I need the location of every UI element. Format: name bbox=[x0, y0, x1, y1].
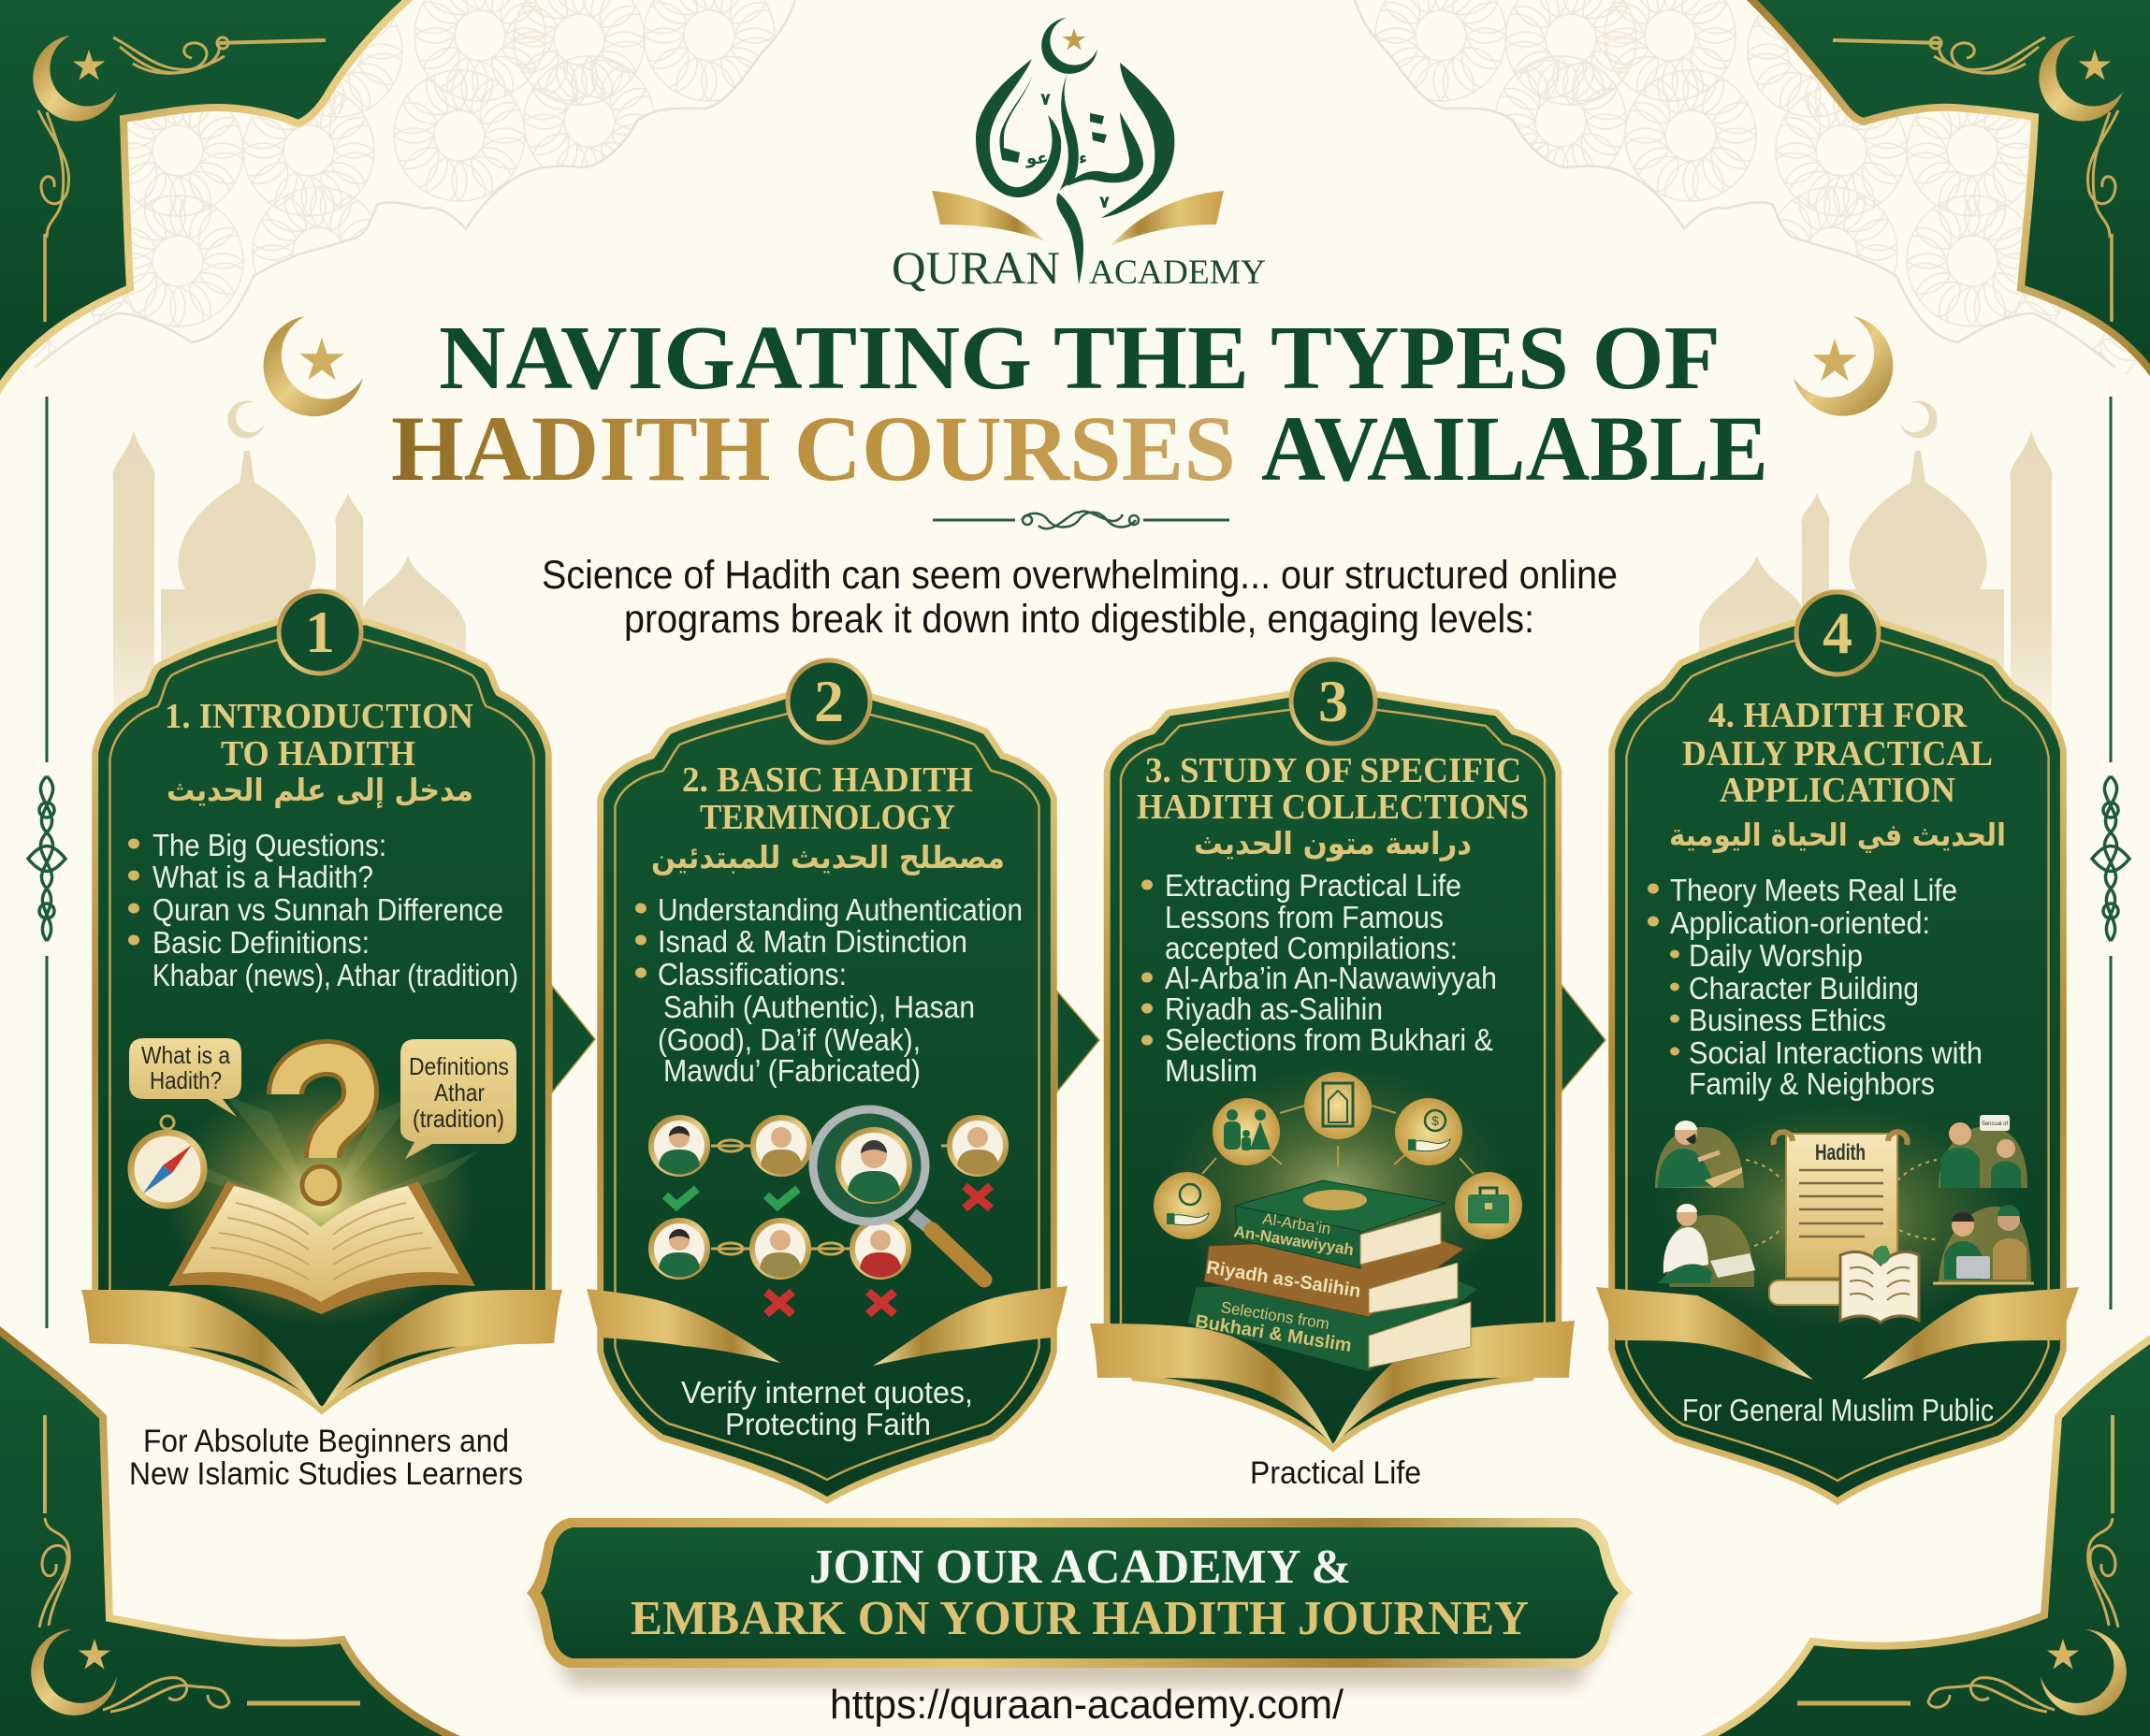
panel 2 heading: 2. BASIC HADITH bbox=[682, 760, 973, 800]
speech bubble: definitions: (tradition) bbox=[413, 1105, 504, 1133]
arrow 3 to 4 bbox=[1562, 985, 1605, 1092]
icon: hadith scroll bbox=[1769, 1132, 1907, 1305]
speech bubble: definitions: Athar bbox=[434, 1078, 485, 1107]
panel 4 heading: APPLICATION bbox=[1720, 771, 1955, 810]
ribbon left bbox=[81, 1290, 322, 1409]
speech bubble: what is a hadith: What is a bbox=[141, 1041, 230, 1069]
icon: question mark bbox=[285, 1058, 360, 1204]
panel 1 heading: مدخل إلى علم الحديث bbox=[167, 772, 473, 809]
panel 1 heading: TO HADITH bbox=[221, 734, 415, 774]
logo small Arabic marks: ء bbox=[1079, 149, 1087, 168]
panel 1 bullets bbox=[128, 828, 518, 992]
icon: open book with leaf bbox=[1840, 1246, 1919, 1323]
corner frame: top right bbox=[1742, 0, 2150, 383]
ribbon left bbox=[587, 1289, 780, 1363]
corner frame: top left bbox=[0, 0, 418, 402]
title bbox=[391, 308, 1768, 500]
speech bubble: definitions: Definitions bbox=[409, 1052, 509, 1080]
ribbon right bbox=[1333, 1321, 1575, 1445]
icon: crescent and star top right bbox=[2039, 36, 2123, 122]
panel 3 number: 3 bbox=[1318, 668, 1348, 734]
icon: open book bbox=[168, 1181, 475, 1314]
panel 1 bullets: The Big Questions: bbox=[153, 828, 386, 862]
title: HADITH COURSES bbox=[391, 397, 1236, 500]
isnad chain row 1 bbox=[651, 1118, 1006, 1175]
vignette: reciting person bbox=[1655, 1121, 1744, 1188]
flourish top left bbox=[38, 37, 326, 322]
background pattern: top right rosettes bbox=[1355, 0, 2149, 397]
panel 1 shape bbox=[95, 622, 548, 1410]
mosque silhouette left bbox=[113, 400, 466, 748]
panel 2 number: 2 bbox=[814, 668, 844, 734]
icon: stack of hadith books bbox=[1187, 1180, 1478, 1372]
icon: magnifying glass bbox=[813, 1109, 984, 1280]
panel 3 shape bbox=[1107, 694, 1559, 1448]
panel 4 bullets: Theory Meets Real Life bbox=[1670, 873, 1957, 907]
small speech note: Sensual of bbox=[1982, 1121, 2009, 1127]
panel 2 bullets: Isnad & Matn Distinction bbox=[658, 924, 967, 959]
panel 3 bullets: Muslim bbox=[1165, 1053, 1257, 1088]
panel 4 bullets: Social Interactions with bbox=[1689, 1035, 1983, 1070]
middle book: Riyadh as-Salihin bbox=[1205, 1257, 1362, 1302]
glow behind books bbox=[1165, 1066, 1511, 1309]
panel 4 heading: DAILY PRACTICAL bbox=[1682, 734, 1993, 774]
panel 2 bullets bbox=[635, 892, 1023, 1088]
speech bubble: definitions bbox=[400, 1039, 516, 1159]
top book: An-Nawawiyyah bbox=[1232, 1222, 1355, 1259]
panel 2 heading: TERMINOLOGY bbox=[700, 798, 955, 837]
panel 2 footer: Verify internet quotes, bbox=[681, 1375, 973, 1410]
panel 1 bullets: Khabar (news), Athar (tradition) bbox=[153, 958, 518, 992]
panel 4 number: 4 bbox=[1823, 600, 1852, 666]
icon: charity hand with coin bbox=[1395, 1098, 1462, 1165]
side line and ornament left bbox=[28, 397, 65, 1328]
ribbon left bbox=[1090, 1324, 1333, 1445]
bottom book: Selections from bbox=[1220, 1298, 1330, 1333]
panel 1 audience label bbox=[129, 1424, 523, 1492]
side line and ornament right bbox=[2092, 397, 2129, 1309]
ribbon right bbox=[322, 1290, 562, 1409]
logo small Arabic marks bbox=[1025, 90, 1110, 212]
panel 4 footer: For General Muslim Public bbox=[1682, 1393, 1994, 1427]
panel 3 heading: دراسة متون الحديث bbox=[1194, 825, 1472, 862]
vignette: two people talking bbox=[1939, 1115, 2027, 1188]
panel 4 shape bbox=[1612, 623, 2063, 1501]
title: AVAILABLE bbox=[1261, 397, 1768, 500]
corner frame: bottom left bbox=[0, 1324, 472, 1736]
panel 3 bullets bbox=[1141, 868, 1497, 1088]
banner green body bbox=[541, 1527, 1619, 1658]
vignette: business at laptop bbox=[1933, 1205, 2034, 1283]
panel 4 bullets: Daily Worship bbox=[1689, 938, 1863, 973]
panel 2 bullets: Mawdu’ (Fabricated) bbox=[663, 1053, 921, 1088]
bottom book bbox=[1187, 1274, 1478, 1372]
logo wordmark: QURAN bbox=[892, 241, 1060, 294]
panel 4 bullets bbox=[1648, 873, 1983, 1101]
panel 1 audience label: For Absolute Beginners and bbox=[143, 1424, 509, 1459]
panel 3 bullets: accepted Compilations: bbox=[1165, 931, 1458, 965]
arc connecting icons bbox=[1202, 1106, 1474, 1174]
panel 1 heading bbox=[165, 697, 473, 809]
logo small Arabic marks: عو bbox=[1025, 149, 1049, 168]
panel 2 number bbox=[788, 660, 870, 743]
icon: briefcase bbox=[1455, 1172, 1522, 1239]
logo emblem: calligraphic strokes bbox=[976, 59, 1174, 284]
icon: title crescent right bbox=[1794, 316, 1893, 416]
panel 1 bullets: What is a Hadith? bbox=[153, 860, 373, 894]
vignette: praying person bbox=[1658, 1204, 1755, 1287]
panel 4 number bbox=[1796, 592, 1879, 674]
panel 1 number bbox=[279, 591, 361, 673]
panel 1 audience label: New Islamic Studies Learners bbox=[129, 1456, 523, 1492]
panel 2 bullets: Classifications: bbox=[658, 957, 847, 991]
logo bbox=[892, 18, 1266, 294]
arrow 1 to 2 bbox=[552, 986, 595, 1092]
panel 2 footer bbox=[681, 1375, 973, 1441]
ribbon right bbox=[873, 1286, 1068, 1366]
panel 2 bullets: Understanding Authentication bbox=[658, 892, 1023, 927]
panel 2 heading: مصطلح الحديث للمبتدئين bbox=[651, 839, 1005, 876]
panel 3 audience label: Practical Life bbox=[1250, 1455, 1421, 1491]
panel 4 heading bbox=[1669, 696, 2006, 854]
banner text bbox=[631, 1541, 1529, 1645]
isnad chain row 2 bbox=[651, 1221, 908, 1278]
panel 4 bullets: Business Ethics bbox=[1689, 1003, 1886, 1037]
title: NAVIGATING THE TYPES OF bbox=[439, 308, 1721, 409]
connector dots bbox=[1746, 1160, 1937, 1246]
top book: Al-Arba’in bbox=[1261, 1209, 1332, 1238]
panel 3 heading: 3. STUDY OF SPECIFIC bbox=[1145, 751, 1521, 790]
arrow 2 to 3 bbox=[1057, 991, 1099, 1092]
panel 1 heading: 1. INTRODUCTION bbox=[165, 697, 473, 736]
panel 4 bullets: Family & Neighbors bbox=[1689, 1066, 1935, 1101]
icon: hand with emblem bbox=[1154, 1172, 1221, 1239]
panel 1 bullets: Quran vs Sunnah Difference bbox=[153, 892, 503, 927]
panel 2: basic hadith terminology bbox=[587, 660, 1099, 1500]
top book bbox=[1232, 1180, 1445, 1268]
panel 2 shape bbox=[601, 696, 1053, 1500]
speech bubble: what is a hadith bbox=[129, 1038, 241, 1117]
logo emblem: crescent and star bbox=[1041, 18, 1097, 74]
panel 3 bullets: Lessons from Famous bbox=[1165, 900, 1444, 934]
icon: crescent and star top left bbox=[33, 36, 117, 122]
ribbon left bbox=[1596, 1287, 1813, 1380]
panel 3 bullets: Extracting Practical Life bbox=[1165, 868, 1461, 903]
icon: prayer mat bbox=[1304, 1072, 1372, 1139]
icon: family bbox=[1213, 1098, 1280, 1165]
banner text: EMBARK ON YOUR HADITH JOURNEY bbox=[631, 1592, 1529, 1645]
panel 3 heading bbox=[1137, 751, 1529, 862]
panel 4 heading: 4. HADITH FOR bbox=[1708, 696, 1968, 735]
logo gold wing right bbox=[1111, 191, 1224, 246]
logo wordmark: ACADEMY bbox=[1089, 253, 1266, 292]
panel 1: introduction to hadith bbox=[81, 591, 595, 1410]
icon: crescent and star bottom left bbox=[31, 1629, 117, 1715]
logo gold wing left bbox=[932, 191, 1045, 241]
mosque silhouette right bbox=[1699, 400, 2052, 748]
panel 4 bullets: Character Building bbox=[1689, 971, 1919, 1005]
intro text: Science of Hadith can seem overwhelming... our structured online bbox=[542, 553, 1618, 598]
banner gold edge bbox=[527, 1518, 1634, 1668]
panel 3 bullets: Riyadh as-Salihin bbox=[1165, 991, 1383, 1026]
logo wordmark bbox=[892, 241, 1266, 294]
icon: hadith scroll: Hadith bbox=[1815, 1140, 1866, 1165]
panel 3: specific hadith collections bbox=[1090, 659, 1605, 1448]
flourish top right bbox=[1833, 37, 2118, 322]
intro text bbox=[542, 553, 1618, 642]
panel 2 bullets: (Good), Da’if (Weak), bbox=[658, 1022, 921, 1057]
panel 3 heading: HADITH COLLECTIONS bbox=[1137, 788, 1529, 827]
logo small Arabic marks: ٧ bbox=[1040, 90, 1051, 109]
website url: https://quraan-academy.com/ bbox=[830, 1682, 1344, 1728]
title divider ornament bbox=[933, 512, 1229, 528]
ribbon right bbox=[1862, 1287, 2079, 1380]
banner text: JOIN OUR ACADEMY & bbox=[809, 1541, 1351, 1594]
intro text: programs break it down into digestible, engaging levels: bbox=[624, 597, 1534, 642]
middle book bbox=[1204, 1237, 1464, 1317]
panel 4 heading: الحديث في الحياة اليومية bbox=[1669, 817, 2006, 854]
panel 3 bullets: Selections from Bukhari & bbox=[1165, 1022, 1493, 1057]
speech bubble: what is a hadith: Hadith? bbox=[150, 1066, 222, 1094]
panel 2 bullets: Sahih (Authentic), Hasan bbox=[663, 990, 975, 1024]
panel 2 footer: Protecting Faith bbox=[725, 1407, 931, 1441]
icon: charity hand with coin: $ bbox=[1431, 1113, 1439, 1128]
bottom book: Bukhari & Muslim bbox=[1194, 1311, 1353, 1356]
background pattern: top left rosettes bbox=[1, 0, 795, 397]
icon: title crescent left bbox=[264, 316, 363, 416]
panel 3 number bbox=[1291, 659, 1375, 744]
icon: crescent and star bottom right bbox=[2041, 1629, 2127, 1715]
logo small Arabic marks: ٧ bbox=[1099, 193, 1110, 212]
panel 2 heading bbox=[651, 760, 1005, 876]
icon: compass bbox=[131, 1116, 204, 1206]
glow behind book bbox=[164, 1076, 479, 1328]
call to action banner bbox=[527, 1518, 1634, 1686]
verification marks bbox=[665, 1186, 991, 1314]
flourish bottom left bbox=[39, 1415, 360, 1712]
panel 1 number: 1 bbox=[305, 599, 335, 665]
panel 4 bullets: Application-oriented: bbox=[1670, 905, 1930, 940]
flourish bottom right bbox=[1797, 1415, 2118, 1712]
panel 3 bullets: Al-Arba’in An-Nawawiyyah bbox=[1165, 961, 1497, 995]
glow behind scroll bbox=[1660, 1104, 2015, 1328]
corner frame: bottom right bbox=[1689, 1333, 2150, 1736]
panel 1 bullets: Basic Definitions: bbox=[153, 925, 370, 960]
panel 4: daily practical application bbox=[1596, 592, 2079, 1501]
